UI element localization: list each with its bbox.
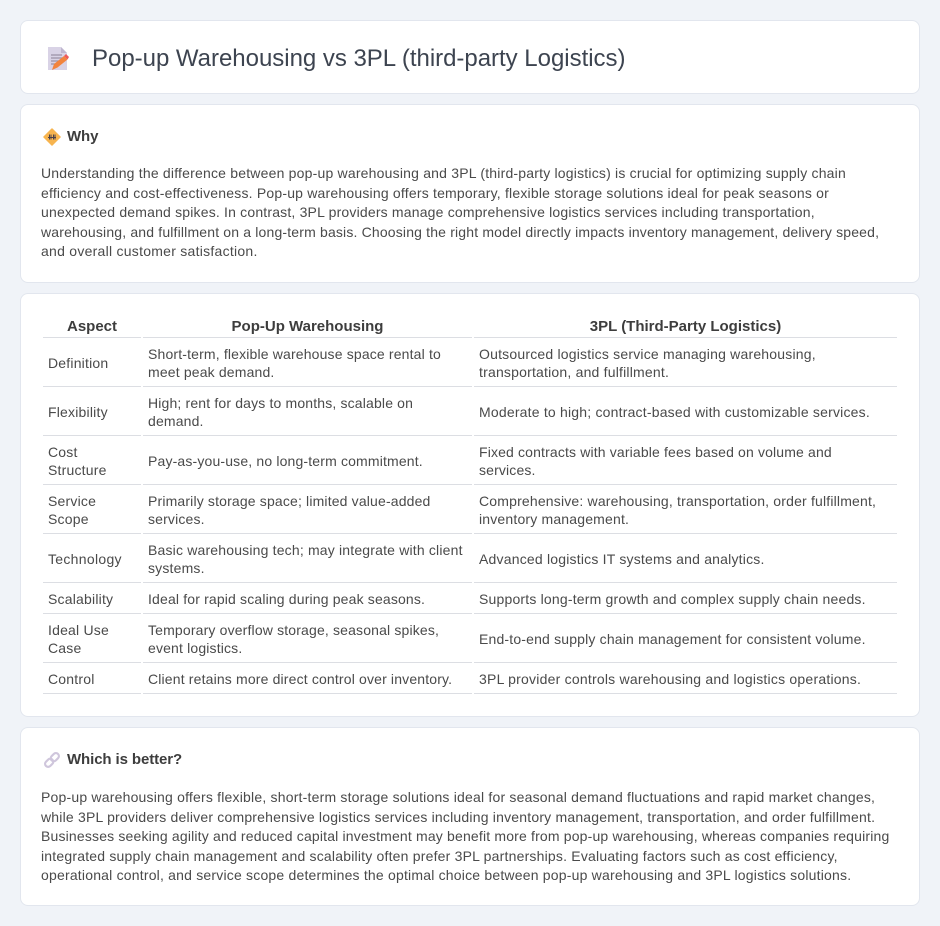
row: service scope: Scope (48, 511, 89, 527)
cell: Basic warehousing tech; may integrate with client (148, 542, 463, 558)
cell: event logistics. (148, 640, 242, 656)
cell: Pay-as-you-use, no long-term commitment. (148, 453, 423, 469)
row: definition: Definition (48, 355, 108, 371)
panel: which is better (20, 727, 920, 906)
cell: inventory management. (479, 511, 629, 527)
panel: title card (20, 20, 920, 94)
heading: why: Why (67, 128, 98, 145)
text: why paragraph: Understanding the difference between pop-up warehousing and 3PL (third-party logistics) is crucial for optimizing supply chain (41, 165, 846, 181)
cell: Advanced logistics IT systems and analytics. (479, 551, 765, 567)
cell: services. (148, 511, 205, 527)
text: why paragraph: efficiency and cost-effectiveness. Pop-up warehousing offers temporary, flexible storage solutions ideal for peak seasons or (41, 185, 829, 201)
row: flexibility: Flexibility (48, 404, 108, 420)
cell (148, 395, 413, 429)
row: cost structure: Cost (48, 444, 78, 460)
cell: Short-term, flexible warehouse space rental to (148, 346, 441, 362)
row: control: Control (48, 671, 95, 687)
cell: End-to-end supply chain management for consistent volume. (479, 631, 866, 647)
icon: document with pencil (48, 47, 69, 70)
cell: Fixed contracts with variable fees based on volume and (479, 444, 832, 460)
cell: 3PL provider controls warehousing and logistics operations. (479, 671, 861, 687)
panel: why (20, 104, 920, 283)
row: service scope: Service (48, 493, 96, 509)
text: why paragraph: warehousing, and fulfillment on a long-term basis. Choosing the right model directly impacts inventory management, delivery speed, (41, 224, 879, 240)
cell: Temporary overflow storage, seasonal spikes, (148, 622, 439, 638)
text: which is better paragraph: operational control, and service scope determines the optimal choice between pop-up warehousing and 3PL logistics solutions. (41, 867, 851, 883)
row: technology: Technology (48, 551, 122, 567)
text: why paragraph (41, 165, 879, 259)
text: which is better paragraph (41, 789, 889, 883)
cell: Supports long-term growth and complex supply chain needs. (479, 591, 866, 607)
text: which is better paragraph: integrated supply chain management and scalability often prefer 3PL partnerships. Evaluating factors such as cost efficiency, (41, 848, 838, 864)
table header: aspect: Aspect (67, 318, 117, 335)
text: which is better paragraph: Businesses seeking agility and reduced capital investment may benefit more from pop-up warehousing, whereas companies requiring (41, 828, 889, 844)
row: scalability: Scalability (48, 591, 113, 607)
row: ideal use case (48, 622, 109, 656)
text: which is better paragraph: while 3PL providers deliver comprehensive logistics services including inventory management, transportation, and order fulfillment. (41, 809, 875, 825)
cell: Ideal for rapid scaling during peak seasons. (148, 591, 425, 607)
cell: Client retains more direct control over inventory. (148, 671, 452, 687)
row: cost structure: Structure (48, 462, 107, 478)
row: ideal use case: Case (48, 640, 81, 656)
cell (479, 444, 832, 478)
cell (479, 346, 816, 380)
row: service scope (48, 493, 96, 527)
cell: High; rent for days to months, scalable on (148, 395, 413, 411)
title: Pop-up Warehousing vs 3PL (third-party Logistics) (92, 45, 625, 72)
cell (148, 346, 441, 380)
cell (479, 493, 876, 527)
text: which is better paragraph: Pop-up warehousing offers flexible, short-term storage solutions ideal for seasonal demand fluctuations and rapid market changes, (41, 789, 875, 805)
cell (148, 622, 439, 656)
heading: which is better: Which is better? (67, 751, 182, 768)
cell: meet peak demand. (148, 364, 274, 380)
cell: services. (479, 462, 536, 478)
table header: pop-up warehousing: Pop-Up Warehousing (232, 318, 383, 335)
table header: 3PL: 3PL (Third-Party Logistics) (590, 318, 781, 335)
cell: Outsourced logistics service managing warehousing, (479, 346, 816, 362)
cell: Primarily storage space; limited value-added (148, 493, 431, 509)
cell (148, 542, 463, 576)
text: why paragraph: unexpected demand spikes. In contrast, 3PL providers manage comprehensive logistics services including transportation, (41, 204, 815, 220)
row: cost structure (48, 444, 107, 478)
icon: warning diamond (43, 128, 61, 146)
icon: link (44, 752, 60, 768)
cell: systems. (148, 560, 205, 576)
row: ideal use case: Ideal Use (48, 622, 109, 638)
cell: transportation, and fulfillment. (479, 364, 669, 380)
cell (148, 493, 431, 527)
cell: Moderate to high; contract-based with customizable services. (479, 404, 870, 420)
text: why paragraph: and overall customer satisfaction. (41, 243, 258, 259)
cell: Comprehensive: warehousing, transportation, order fulfillment, (479, 493, 876, 509)
panel: comparison table (20, 293, 920, 717)
cell: demand. (148, 413, 204, 429)
